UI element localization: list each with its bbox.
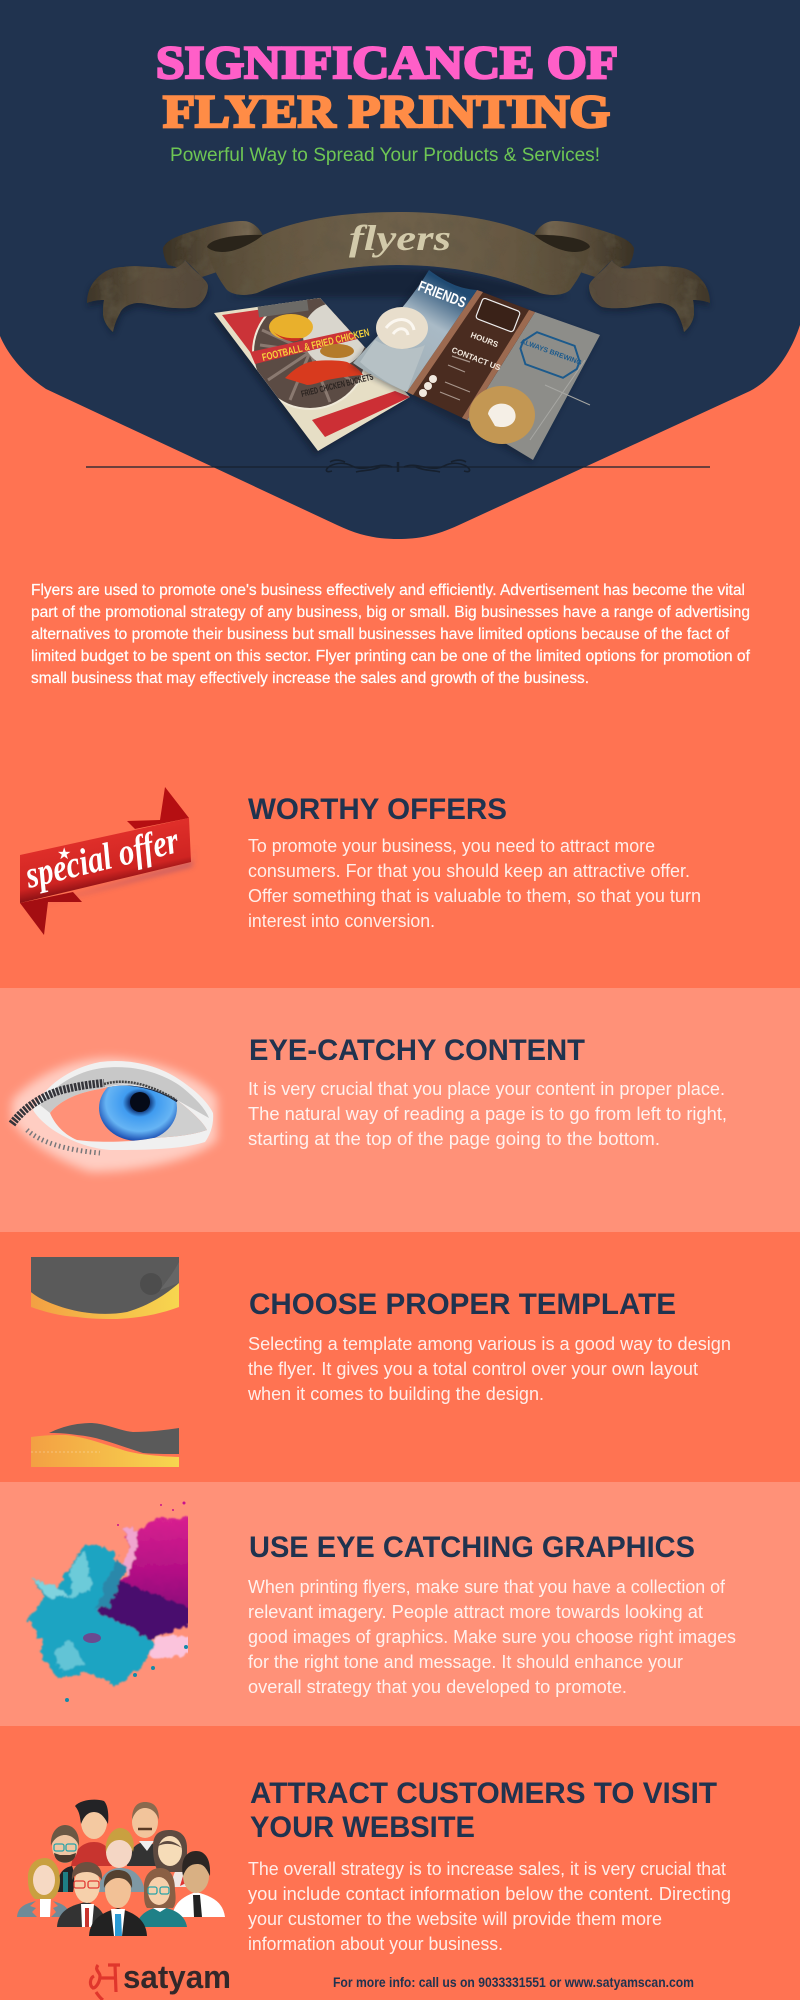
person: teal woman — [136, 1868, 187, 1927]
logo mark — [90, 1965, 120, 2000]
flyer headline: FOOTBALL & FRIED CHICKEN — [261, 327, 371, 364]
person: white shirt tie — [172, 1851, 225, 1917]
intro paragraph: part of the promotional strategy of any business, big or small. Big businesses have a range of advertising — [31, 604, 750, 621]
panel: choose proper template — [31, 1257, 731, 1467]
body text: The overall strategy is to increase sales, it is very crucial that — [248, 1859, 726, 1879]
body text — [248, 1577, 736, 1697]
icon: football and fried chicken flyer — [211, 294, 410, 455]
panel: use eye catching graphics — [0, 1482, 800, 1726]
title line 2: FLYER PRINTING — [163, 86, 610, 138]
body text: relevant imagery. People attract more towards looking at — [248, 1602, 703, 1622]
heading: CHOOSE PROPER TEMPLATE — [249, 1288, 676, 1321]
flyer contact label: CONTACT US — [450, 345, 503, 373]
body text: It is very crucial that you place your content in proper place. — [248, 1079, 725, 1099]
body text: interest into conversion. — [248, 911, 435, 931]
body text: starting at the top of the page going to the bottom. — [248, 1129, 660, 1149]
ribbon label: flyers — [349, 218, 451, 258]
body text: overall strategy that you developed to promote. — [248, 1677, 627, 1697]
body text: information about your business. — [248, 1934, 503, 1954]
body text — [247, 1334, 731, 1404]
body text: consumers. For that you should keep an attractive offer. — [248, 861, 690, 881]
panel: worthy offers — [20, 787, 701, 935]
body text: for the right tone and message. It should enhance your — [248, 1652, 683, 1672]
ribbon label: special offer — [21, 819, 184, 897]
person: blond woman — [17, 1858, 70, 1917]
heading: ATTRACT CUSTOMERS TO VISIT — [250, 1777, 717, 1810]
heading: USE EYE CATCHING GRAPHICS — [249, 1531, 695, 1564]
panel: eye-catchy content — [0, 988, 800, 1232]
flyer logo text: ALWAYS BREWING — [519, 338, 583, 367]
icon: ribbon banner — [87, 212, 710, 336]
logo: satyam — [90, 1959, 231, 2000]
heading: YOUR WEBSITE — [250, 1811, 475, 1844]
heading: EYE-CATCHY CONTENT — [249, 1034, 585, 1067]
person: blue tie center — [89, 1870, 147, 1936]
icon: template top — [31, 1257, 179, 1319]
body text — [248, 836, 701, 931]
logo wordmark: satyam — [123, 1959, 231, 1995]
body text: When printing flyers, make sure that you have a collection of — [248, 1577, 726, 1597]
icon: template bottom — [31, 1423, 179, 1467]
icon: special offer ribbon — [20, 787, 196, 935]
intro paragraph: small business that may effectively increase the sales and growth of the business. — [31, 670, 589, 687]
person: moustache vest — [127, 1802, 160, 1866]
subtitle: Powerful Way to Spread Your Products & Services! — [170, 145, 600, 166]
flyer heading: FRIENDS — [416, 278, 468, 312]
header panel: navy shape — [0, 0, 800, 539]
intro paragraph: alternatives to promote their business but small businesses have limited options because of the fact of — [31, 626, 730, 643]
person: blond grey shirt — [97, 1828, 145, 1892]
intro paragraph — [31, 582, 751, 687]
title — [156, 37, 618, 138]
body text: when it comes to building the design. — [247, 1384, 544, 1404]
flyer hours label: HOURS — [469, 330, 500, 349]
icon: watercolor splash — [27, 1502, 196, 1702]
body text — [248, 1859, 731, 1954]
flyer sub headline: FRIED CHICKEN BUCKETS — [300, 372, 374, 399]
icon: group of people — [17, 1800, 225, 1936]
icon: coffee tri-fold flyer — [351, 270, 600, 463]
body text: Selecting a template among various is a good way to design — [248, 1334, 731, 1354]
ribbon star: ★ — [57, 844, 71, 863]
footer contact line: For more info: call us on 9033331551 or www.satyamscan.com — [333, 1974, 694, 1990]
body text: you include contact information below the content. Directing — [248, 1884, 731, 1904]
heading — [250, 1777, 717, 1844]
panel: attract customers — [17, 1777, 731, 1954]
body text: good images of graphics. Make sure you choose right images — [248, 1627, 736, 1647]
title line 1: SIGNIFICANCE OF — [156, 37, 618, 89]
person: beard and glasses — [51, 1825, 79, 1892]
heading: WORTHY OFFERS — [248, 793, 507, 826]
divider with ornament — [86, 460, 710, 472]
body text — [248, 1079, 727, 1149]
intro paragraph: Flyers are used to promote one's business effectively and efficiently. Advertisement has become the vital — [31, 582, 745, 599]
person: red glasses suit — [57, 1862, 107, 1927]
body text: The natural way of reading a page is to go from left to right, — [248, 1104, 727, 1124]
body text: To promote your business, you need to attract more — [248, 836, 655, 856]
icon: eye — [12, 1058, 217, 1172]
intro paragraph: limited budget to be spent on this sector. Flyer printing can be one of the limited options for promotion of — [31, 648, 751, 665]
body text: Offer something that is valuable to them, so that you turn — [248, 886, 701, 906]
person: dark hair woman — [153, 1830, 190, 1887]
body text: your customer to the website will provide them more — [248, 1909, 662, 1929]
body text: the flyer. It gives you a total control over your own layout — [248, 1359, 698, 1379]
person: red shirt — [71, 1800, 112, 1866]
